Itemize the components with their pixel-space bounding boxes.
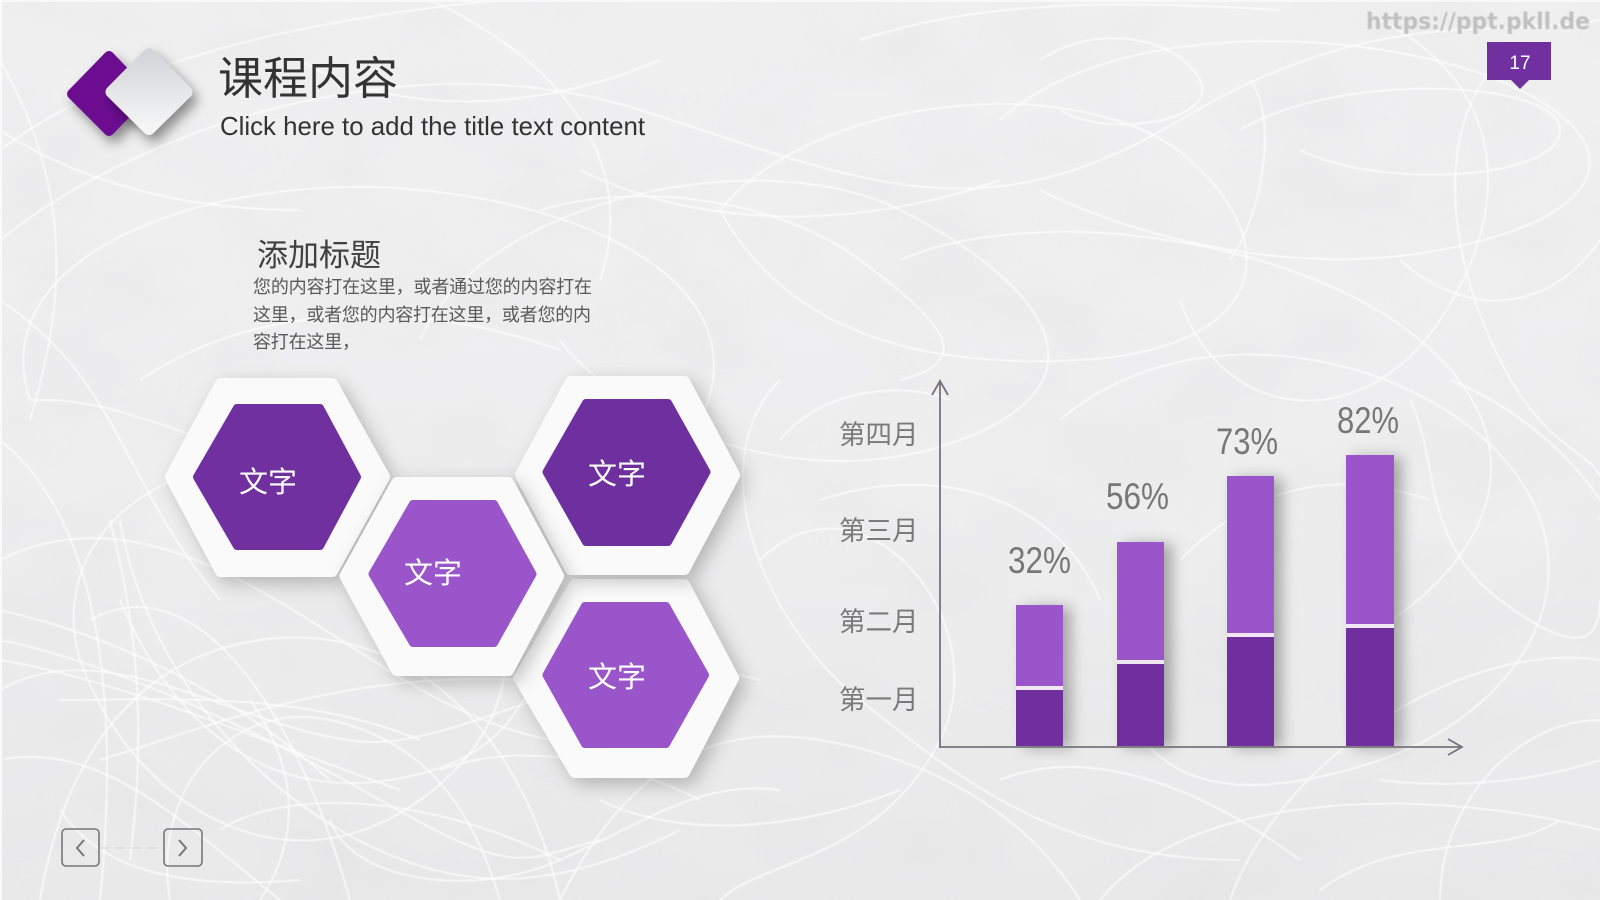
button: next	[164, 829, 202, 866]
arrow: y axis	[932, 381, 948, 747]
hexagon: top left dark: 文字	[239, 466, 297, 499]
month axis labels: 第二月	[839, 607, 918, 637]
text block: heading and body: 这里，或者您的内容打在这里，或者您的内	[253, 305, 591, 325]
hexagon: top left dark	[171, 384, 384, 571]
month axis labels: 第三月	[839, 516, 918, 546]
bar: 56%	[1106, 476, 1169, 746]
bar: 73%	[1216, 421, 1278, 746]
text block: heading and body: 添加标题	[257, 238, 381, 273]
hexagon: top right dark: 文字	[588, 458, 646, 491]
text block: heading and body: 您的内容打在这里，或者通过您的内容打在	[253, 277, 592, 297]
hexagon: middle light	[346, 483, 558, 670]
subtitle: Click here to add the title text content	[220, 111, 646, 141]
stacked bar chart	[839, 381, 1462, 755]
button: previous	[62, 829, 99, 866]
hexagon: middle light: 文字	[404, 557, 462, 590]
bar: 82%	[1337, 400, 1399, 746]
month axis labels: 第四月	[839, 420, 918, 450]
bar: 32%	[1008, 540, 1071, 746]
bar: 82%: 82%	[1337, 400, 1399, 441]
hexagon: bottom right light: 文字	[588, 661, 646, 694]
watermark url: https://ppt.pkll.de	[1366, 9, 1590, 35]
bar: 73%: 73%	[1216, 421, 1278, 462]
hexagon: bottom right light	[520, 585, 733, 772]
month axis labels: 第一月	[839, 685, 918, 715]
faint line between nav buttons	[99, 847, 163, 849]
icon: overlapping diamonds logo	[72, 54, 186, 131]
title: 课程内容	[218, 53, 398, 104]
page number badge	[1487, 42, 1551, 89]
arrow: x axis	[939, 739, 1462, 755]
text block: heading and body	[253, 238, 592, 352]
month axis labels	[839, 420, 918, 715]
hexagon: top right dark	[521, 382, 734, 569]
text block: heading and body: 容打在这里，	[253, 332, 360, 352]
bar: 32%: 32%	[1008, 540, 1071, 581]
bar: 56%: 56%	[1106, 476, 1169, 517]
page number badge: 17	[1509, 53, 1531, 74]
